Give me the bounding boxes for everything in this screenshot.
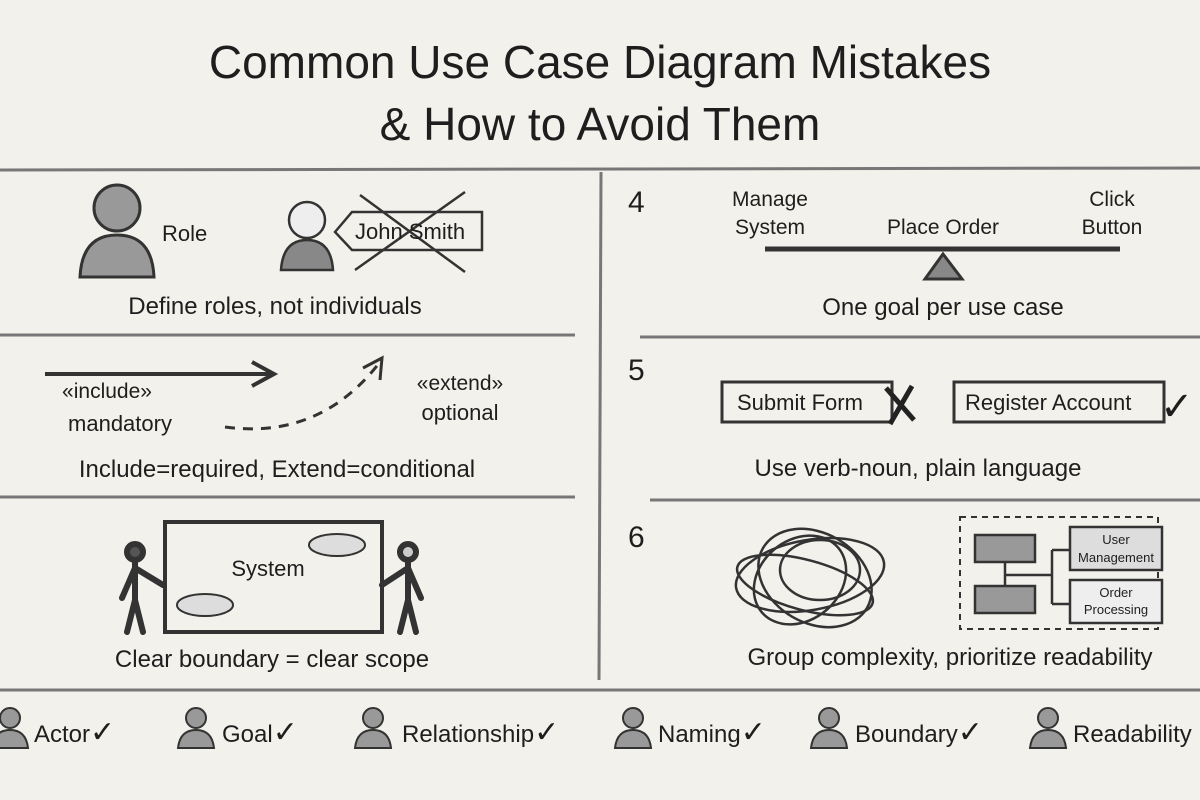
panel 4: one goal: System	[735, 216, 805, 239]
icon: individual with crossed tag	[281, 192, 482, 272]
panel: include/extend: «extend»	[417, 372, 503, 395]
title	[209, 36, 991, 150]
title: Common Use Case Diagram Mistakes	[209, 36, 991, 88]
panel: include/extend: Include=required, Extend=conditional	[79, 456, 475, 483]
panel 5: naming: ✓	[1160, 385, 1194, 429]
panel 6: complexity: Processing	[1084, 602, 1148, 617]
panel 4: one goal: One goal per use case	[822, 294, 1064, 321]
icon: actors	[122, 544, 421, 632]
system box	[165, 522, 382, 632]
panel 4: one goal: Button	[1082, 216, 1142, 239]
panel 4: one goal: Manage	[732, 188, 808, 211]
panel: include/extend: optional	[421, 400, 499, 425]
icon: balance	[765, 249, 1120, 279]
footer checklist: Naming✓	[658, 716, 766, 749]
panel: roles: John Smith	[355, 219, 465, 244]
panel 5: naming: Register Account	[965, 390, 1131, 415]
panel 6: complexity: Management	[1078, 550, 1154, 565]
panel 6: complexity	[628, 509, 1162, 671]
panel: include/extend: «include»	[62, 380, 152, 403]
panel 6: complexity: Group complexity, prioritize readability	[747, 644, 1153, 671]
panel 4: one goal: Place Order	[887, 216, 999, 239]
footer checklist: Boundary✓	[855, 716, 983, 749]
panel: boundary: System	[231, 556, 305, 581]
panel 4: one goal: Click	[1089, 188, 1135, 211]
panel 4: one goal: 4	[628, 186, 645, 219]
arrow: include	[45, 362, 274, 386]
panel 5: naming: Submit Form	[737, 390, 863, 415]
panel: include/extend: mandatory	[68, 411, 172, 436]
panel 6: complexity: Order	[1099, 585, 1133, 600]
panel: include/extend	[45, 358, 503, 483]
footer checklist	[0, 708, 1192, 749]
footer checklist: Actor✓	[34, 716, 115, 749]
icon: tangle	[730, 509, 890, 647]
panel 6: complexity: 6	[628, 521, 645, 554]
footer checklist: Readability	[1073, 721, 1192, 748]
arrow: extend dashed	[225, 358, 382, 429]
panel: roles	[80, 185, 482, 320]
icon: cross mark	[886, 386, 914, 424]
panel 5: naming: 5	[628, 354, 645, 387]
panel 5: naming	[628, 354, 1194, 482]
icon: grouped modules	[960, 517, 1162, 629]
footer checklist: Goal✓	[222, 716, 298, 749]
title: & How to Avoid Them	[380, 98, 820, 150]
panel: boundary	[115, 522, 429, 673]
panel 6: complexity: User	[1102, 532, 1130, 547]
icon: role actor	[80, 185, 154, 277]
panel 5: naming: Use verb-noun, plain language	[755, 455, 1081, 482]
footer checklist: Relationship✓	[402, 716, 559, 749]
panel: roles: Define roles, not individuals	[128, 293, 422, 320]
panel: roles: Role	[162, 221, 207, 246]
panel 4: one goal	[628, 186, 1142, 321]
panel: boundary: Clear boundary = clear scope	[115, 646, 429, 673]
